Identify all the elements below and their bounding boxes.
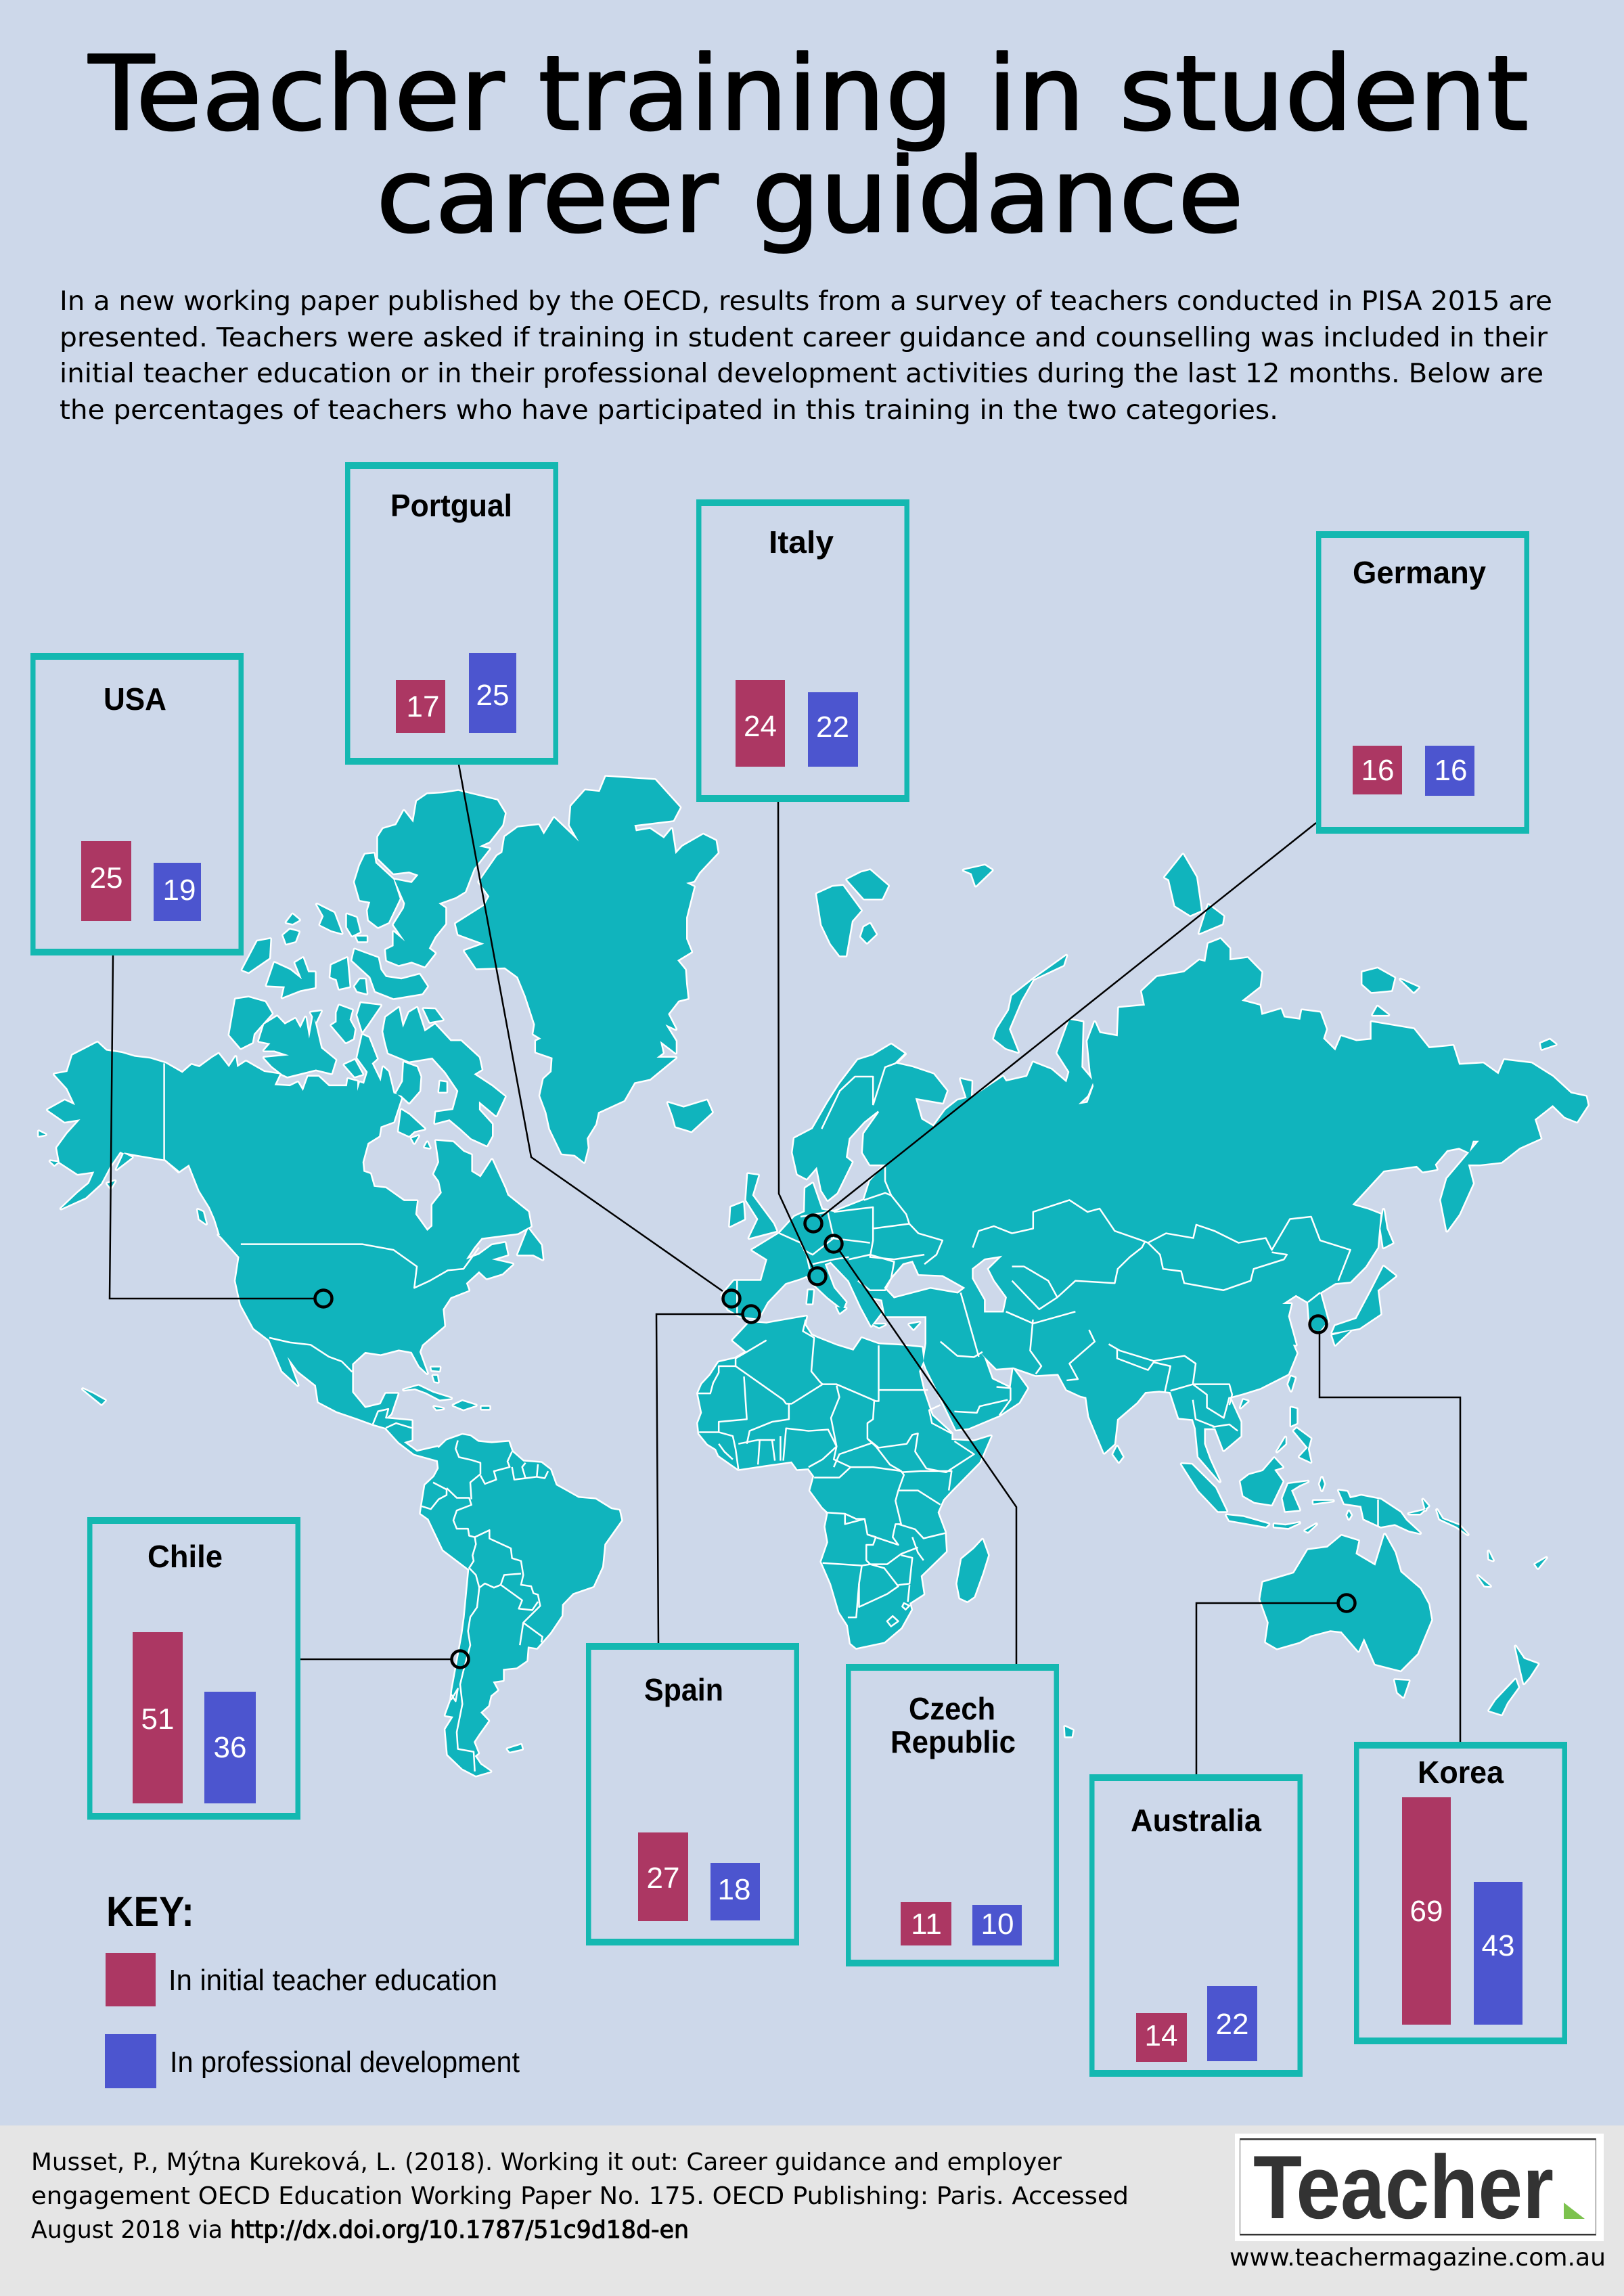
location markers: [315, 1215, 1355, 1667]
connector: Australia: [1196, 1603, 1338, 1774]
bar: USA professional 19: [154, 863, 201, 921]
source citation: Musset, P., Mýtna Kureková, L. (2018). Working it out: Career guidance and employer: [31, 2148, 1062, 2176]
panel: Italy: [696, 499, 909, 802]
map: inland seas: [885, 1257, 1006, 1311]
connector: Czech Republic: [840, 1251, 1016, 1664]
legend heading: KEY:: [106, 1889, 194, 1935]
connector: USA: [110, 955, 315, 1299]
panel: Chile: [87, 1517, 300, 1820]
Teacher logo: Teacher: [1253, 2138, 1554, 2238]
legend item: professional development: [105, 2034, 520, 2088]
panel: Germany: [1316, 531, 1529, 834]
bar: Portugal professional 25: [469, 653, 516, 733]
panel: Spain: [586, 1643, 799, 1945]
world map: [39, 777, 1587, 1776]
bar: Italy professional 22: 22: [816, 711, 849, 744]
bar: Czech Republic professional 10: [972, 1905, 1022, 1945]
heading: USA: USA: [104, 681, 166, 717]
map: country borders Africa, Asia and Oceania: [698, 1320, 1378, 1626]
connector: Portugal: [459, 765, 723, 1291]
bar: Italy initial 24: [736, 680, 785, 767]
bar: Chile initial 51: [133, 1632, 183, 1803]
bar: Spain initial 27: [638, 1832, 688, 1921]
heading: Korea: Korea: [1418, 1755, 1504, 1790]
bar: Czech Republic initial 11: [901, 1902, 951, 1945]
heading: Chile: Chile: [148, 1539, 223, 1574]
bar: Czech Republic professional 10: 10: [981, 1908, 1014, 1941]
connector: Chile: [300, 1659, 451, 1660]
bar: Spain professional 18: [710, 1863, 760, 1920]
bar: Czech Republic initial 11: 11: [911, 1908, 942, 1941]
website url: www.teachermagazine.com.au: [1230, 2244, 1606, 2272]
connector: Germany: [821, 823, 1316, 1217]
connector: Korea: [1320, 1333, 1460, 1742]
map: Africa and Madagascar: [698, 1316, 991, 1648]
bar: Korea professional 43: 43: [1482, 1929, 1514, 1962]
intro text block: In a new working paper published by the OECD, results from a survey of teachers conducted in PISA 2015 are: [60, 286, 1552, 317]
bar: Portugal initial 17: [396, 680, 445, 733]
intro text block: the percentages of teachers who have participated in this training in the two categories.: [60, 395, 1278, 426]
panel: Australia: [1089, 1774, 1303, 2077]
map: South America and Caribbean: [404, 1368, 621, 1776]
map: North America and Arctic Canada: [39, 791, 543, 1461]
panel: Portugal: [345, 462, 558, 765]
bar: USA professional 19: 19: [163, 874, 196, 907]
heading: Spain: Spain: [644, 1672, 723, 1707]
heading: Australia: Australia: [1131, 1803, 1261, 1838]
footer band: [0, 2125, 1624, 2296]
panel: Czech Republic: [846, 1664, 1059, 1966]
bar: Korea initial 69: 69: [1410, 1895, 1443, 1928]
panel: USA: [30, 653, 244, 955]
bar: Germany initial 16: 16: [1361, 754, 1394, 787]
legend item: initial teacher education: [106, 1953, 497, 2006]
bar: Portugal initial 17: 17: [407, 690, 439, 723]
bar: Spain initial 27: 27: [647, 1862, 679, 1895]
bar: Australia professional 22: [1207, 1986, 1257, 2061]
legend item: initial teacher education: In initial teacher education: [168, 1964, 497, 1997]
bar: Australia initial 14: [1136, 2013, 1187, 2062]
bar: Korea professional 43: [1474, 1882, 1522, 2025]
legend item: professional development: In professional development: [170, 2046, 520, 2079]
bar: Chile professional 36: 36: [214, 1731, 246, 1764]
map: country borders North America: [164, 1063, 479, 1428]
connector: Spain: [656, 1314, 742, 1643]
map: Eurasia north: [722, 855, 1587, 1345]
intro text block: initial teacher education or in their professional development activities during the last 12 months. Below are: [60, 359, 1543, 389]
title: [88, 34, 1529, 256]
bar: Portugal professional 25: 25: [476, 679, 509, 712]
legend: [105, 1889, 520, 2088]
map: southern Asia, Arabia and South-East Asia: [924, 1304, 1351, 1532]
map: country borders Europe and northern Asia: [737, 1054, 1351, 1357]
map: country borders South America: [422, 1441, 548, 1772]
bar: Germany professional 16: 16: [1435, 754, 1467, 787]
map: Greenland and Iceland: [455, 777, 718, 1162]
title: career guidance: [376, 136, 1244, 256]
heading: Germany: Germany: [1353, 555, 1486, 590]
source citation: [31, 2148, 1129, 2244]
intro text block: [60, 286, 1552, 426]
heading: Portugal: Portgual: [390, 488, 512, 523]
bar: USA initial 25: 25: [90, 861, 122, 895]
bar: Italy professional 22: [808, 692, 858, 767]
heading: Czech Republic: Republic: [890, 1724, 1016, 1759]
heading: Czech Republic: Czech: [909, 1691, 995, 1726]
panel: Korea: [1354, 1742, 1567, 2044]
bar: Spain professional 18: 18: [718, 1873, 750, 1906]
bar: Germany initial 16: [1353, 746, 1402, 794]
bar: Chile professional 36: [204, 1692, 256, 1803]
heading: Italy: Italy: [769, 524, 834, 560]
connector: Italy: [778, 802, 813, 1267]
source citation: engagement OECD Education Working Paper No. 175. OECD Publishing: Paris. Accessed: [31, 2182, 1129, 2210]
heading: Czech Republic: [890, 1691, 1016, 1759]
source citation: August 2018 via: [31, 2216, 223, 2244]
bar: Korea initial 69: [1402, 1797, 1451, 2025]
bar: Germany professional 16: [1425, 746, 1474, 796]
bar: USA initial 25: [81, 841, 131, 921]
title: Teacher training in student: [88, 34, 1529, 154]
bar: Italy initial 24: 24: [744, 710, 777, 743]
source citation: http://dx.doi.org/10.1787/51c9d18d-en: [230, 2216, 689, 2244]
bar: Australia initial 14: 14: [1145, 2019, 1177, 2052]
bar: Chile initial 51: 51: [141, 1703, 174, 1736]
intro text block: presented. Teachers were asked if training in student career guidance and counselling was included in their: [60, 323, 1548, 353]
map: Australia, New Guinea and New Zealand: [1065, 1491, 1546, 1736]
bar: Australia professional 22: 22: [1216, 2008, 1248, 2041]
